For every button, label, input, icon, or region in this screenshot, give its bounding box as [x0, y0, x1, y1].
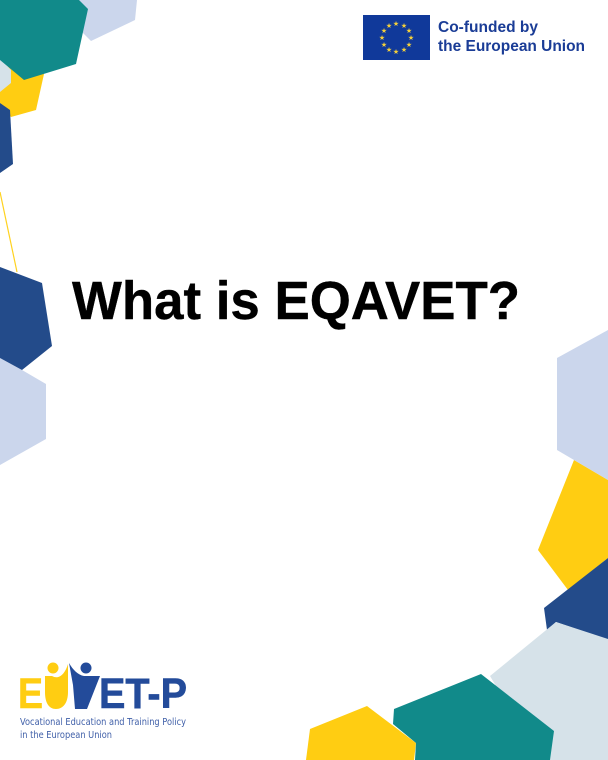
funding label: Co-funded by	[438, 19, 538, 36]
icon: yellow figure forming U	[45, 662, 68, 709]
icon: EU flag: ★	[379, 34, 385, 42]
icon: EU flag: ★	[393, 20, 399, 28]
hexagon cluster: right side	[538, 330, 608, 640]
logo tagline: in the European Union	[20, 730, 112, 741]
funding label: the European Union	[438, 38, 585, 55]
funding label	[438, 19, 585, 55]
icon: EU flag: ★	[406, 41, 412, 49]
logo letter E: E	[18, 670, 43, 718]
icon: EU flag: ★	[386, 46, 392, 54]
icon: EU flag: ★	[406, 27, 412, 35]
icon: EU flag: ★	[401, 46, 407, 54]
title: What is EQAVET?	[72, 272, 520, 331]
icon: EU flag: ★	[381, 27, 387, 35]
icon: EU flag: ★	[381, 41, 387, 49]
hexagon cluster: top left	[0, 0, 137, 173]
icon: EU flag: ★	[401, 22, 407, 30]
icon: EU flag: ★	[393, 48, 399, 56]
logo: EUVET-P	[18, 662, 187, 741]
logo letters ET-P: ET-P	[99, 670, 187, 718]
logo: co-funded by the European Union	[363, 15, 585, 60]
icon: blue figure forming V	[69, 662, 100, 709]
icon: EU flag	[363, 15, 430, 60]
logo tagline	[20, 717, 186, 741]
hexagon cluster: middle left	[0, 267, 52, 465]
accent line: yellow	[0, 192, 17, 272]
logo tagline: Vocational Education and Training Policy	[20, 717, 186, 728]
icon: EU flag: ★	[386, 22, 392, 30]
hexagon cluster: bottom right	[306, 622, 608, 760]
icon: EU flag: ★	[408, 34, 414, 42]
